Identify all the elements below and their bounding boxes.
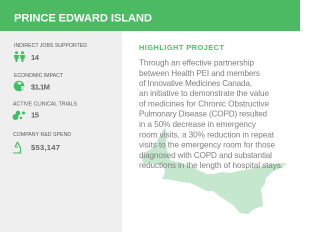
stat: indirect jobs: INDIRECT JOBS SUPPORTED [14, 43, 87, 49]
stat: indirect jobs [14, 43, 87, 62]
stat: indirect jobs: 14 [31, 53, 40, 62]
stat: company R&D spend: $53,147 [31, 143, 60, 152]
text block: project description: visits to the emergency room for those [139, 141, 275, 150]
stat: economic impact: ECONOMIC IMPACT [14, 73, 64, 79]
text block: project description: in a 50% decrease in emergency [139, 120, 257, 129]
text block: project description: of medicines for Chronic Obstructive [139, 99, 269, 108]
header band [0, 0, 300, 31]
title: PRINCE EDWARD ISLAND [14, 12, 152, 24]
text block: project description: an initiative to demonstrate the value [139, 89, 269, 98]
stat: active clinical trials: ACTIVE CLINICAL TRIALS [13, 102, 78, 108]
text block: project description: of Innovative Medicines Canada, [139, 79, 252, 88]
text block: project description: Pulmonary Disease (COPD) resulted [139, 110, 267, 119]
panel: stats sidebar [0, 31, 122, 232]
text block: project description [139, 58, 283, 170]
text block: project description: between Health PEI and members [139, 69, 260, 78]
stat: active clinical trials [12, 102, 78, 120]
text block: project description: room visits, a 30% reduction in repeat [139, 130, 275, 139]
stat: economic impact: $1.1M [31, 82, 50, 92]
stat: company R&D spend [13, 132, 71, 153]
icon: globe [14, 81, 24, 91]
stat: economic impact [14, 73, 64, 92]
stat: active clinical trials: 15 [31, 110, 40, 120]
icon: people [14, 51, 25, 62]
text block: project description: Through an effective partnership [139, 58, 254, 68]
map: Prince Edward Island [141, 127, 287, 214]
text block: project description: reductions in the length of hospital stays. [139, 161, 283, 170]
icon: molecules [12, 111, 25, 120]
icon: microscope [13, 142, 22, 153]
stat: company R&D spend: COMPANY R&D SPEND [13, 132, 71, 138]
text block: project description: diagnosed with COPD and substantial [139, 151, 272, 160]
heading: highlight project: HIGHLIGHT PROJECT [139, 43, 224, 52]
